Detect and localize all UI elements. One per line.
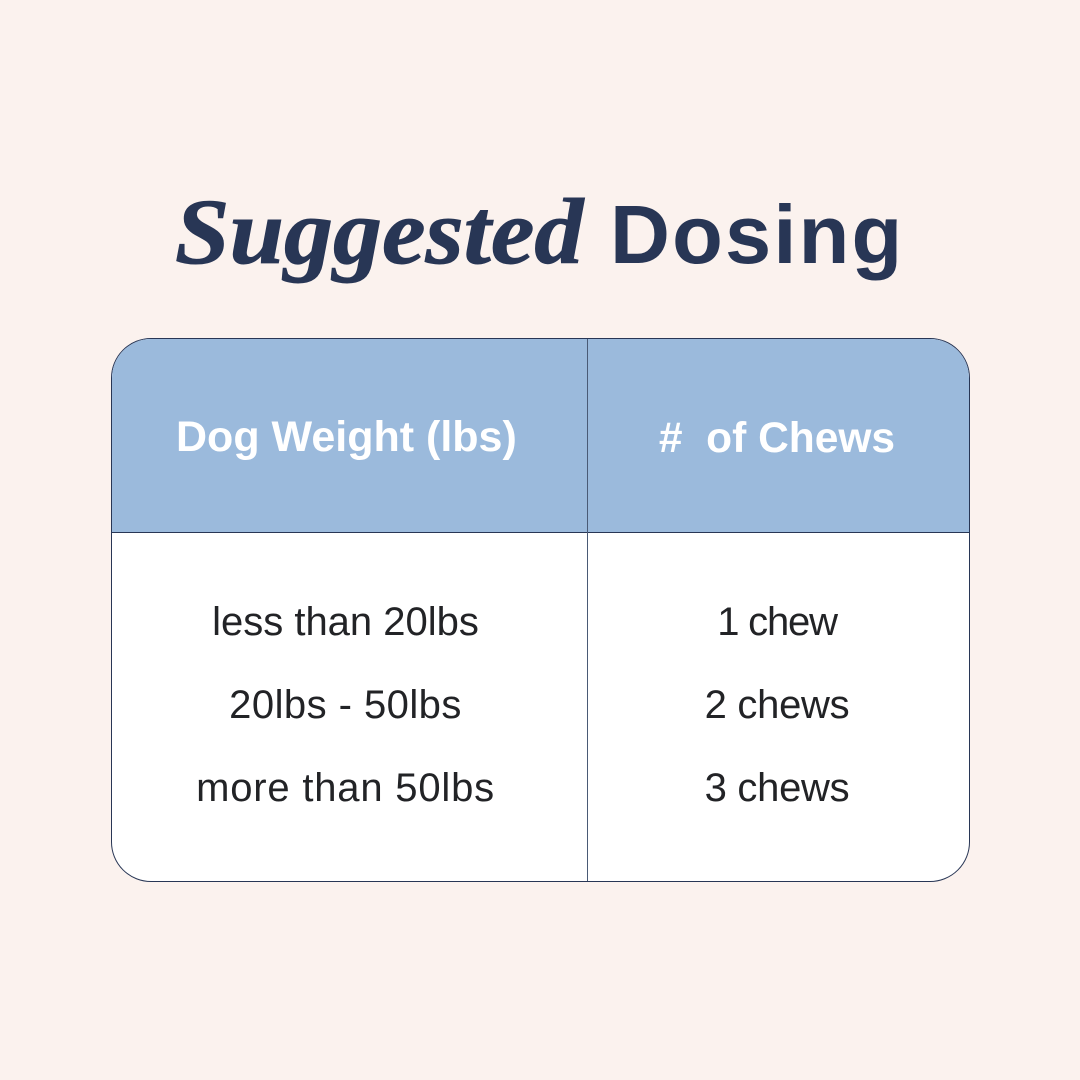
title: Suggested: Suggested <box>175 181 583 284</box>
title <box>175 181 904 284</box>
weight row 1: less than 20lbs <box>212 600 479 644</box>
header: Dog Weight: Dog Weight (lbs) <box>176 413 517 461</box>
column divider <box>587 339 588 881</box>
dosing table <box>111 338 970 882</box>
weight row 2: 20lbs - 50lbs <box>229 683 462 727</box>
title: Dosing: Dosing <box>610 188 904 281</box>
header row <box>112 339 969 533</box>
chews row 1: 1 chew <box>717 600 837 644</box>
header: number of chews: # of Chews <box>659 415 895 462</box>
chews row 2: 2 chews <box>705 683 849 727</box>
chews row 3: 3 chews <box>705 766 849 810</box>
weight row 3: more than 50lbs <box>196 766 495 810</box>
